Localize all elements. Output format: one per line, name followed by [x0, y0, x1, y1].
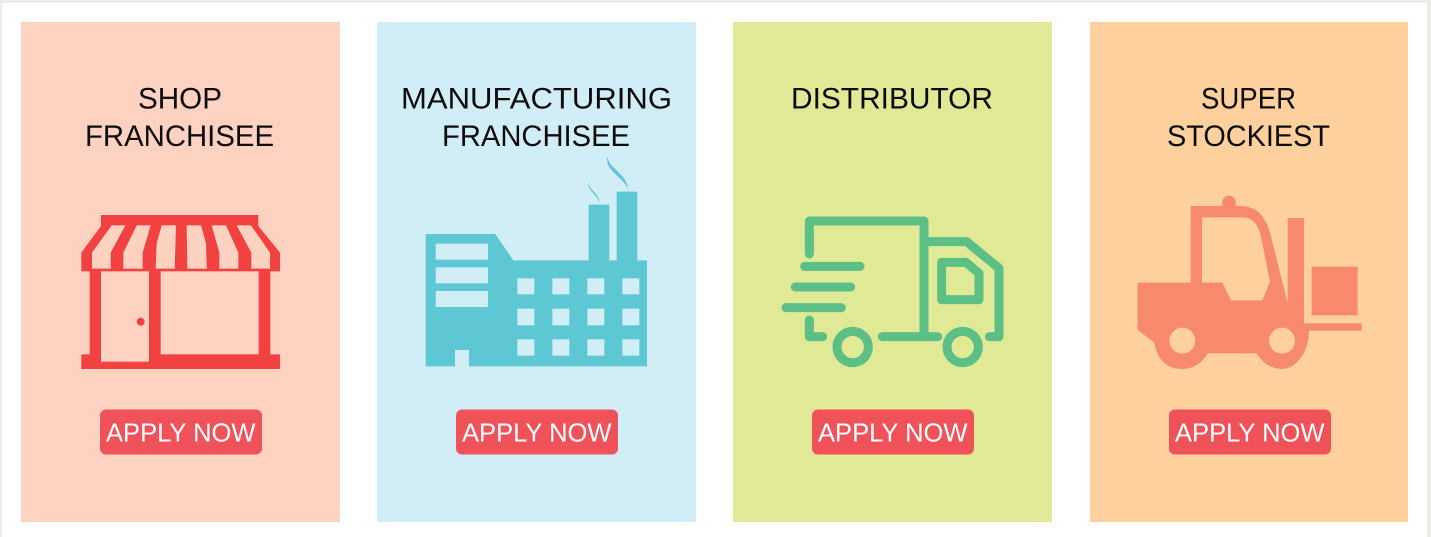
heading: shop franchisee: [85, 82, 274, 153]
icon: storefront: [81, 215, 280, 369]
icon: factory: [426, 157, 647, 366]
button: apply now: [456, 410, 618, 454]
button: apply now: [1169, 410, 1331, 454]
heading: shop franchisee: FRANCHISEE: [85, 120, 274, 153]
icon: forklift: [1138, 196, 1362, 369]
button: apply now: [100, 410, 262, 454]
button: apply now: [812, 410, 974, 454]
button: apply now: APPLY NOW: [462, 420, 612, 448]
heading: distributor: DISTRIBUTOR: [791, 82, 993, 116]
heading: manufacturing franchisee: FRANCHISEE: [442, 120, 630, 153]
button: apply now: APPLY NOW: [106, 420, 256, 448]
heading: super stockiest: STOCKIEST: [1167, 120, 1330, 153]
heading: manufacturing franchisee: [401, 82, 672, 153]
button: apply now: APPLY NOW: [818, 420, 968, 448]
button: apply now: APPLY NOW: [1175, 420, 1324, 448]
heading: super stockiest: SUPER: [1201, 82, 1296, 116]
heading: super stockiest: [1167, 82, 1330, 153]
panel: distributor: [733, 22, 1052, 522]
panel: super stockiest: [1090, 22, 1408, 522]
icon: delivery truck: [786, 221, 999, 363]
panel: manufacturing franchisee: [377, 22, 696, 522]
heading: shop franchisee: SHOP: [138, 82, 222, 116]
panel: shop franchisee: [21, 22, 340, 522]
heading: manufacturing franchisee: MANUFACTURING: [401, 82, 672, 116]
